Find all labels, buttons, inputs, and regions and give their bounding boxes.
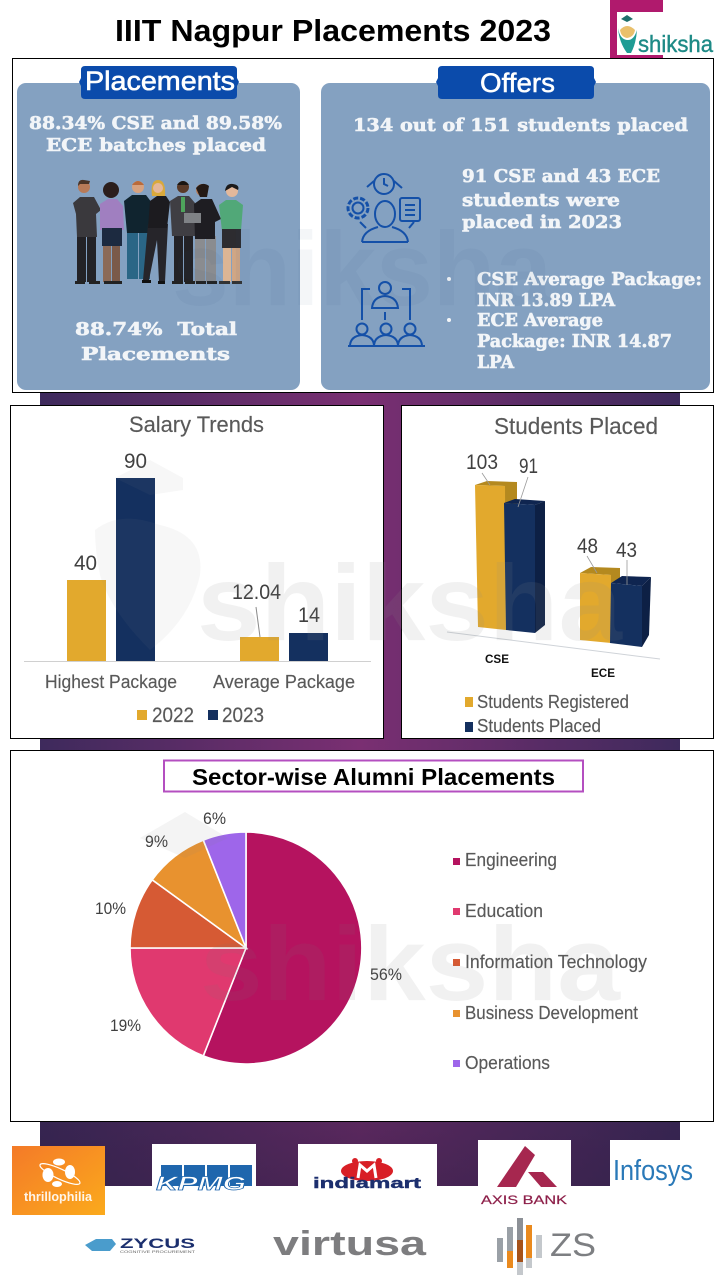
3d bar chart: students placed: CSE: [485, 652, 509, 666]
person 6: [184, 184, 221, 284]
bar chart: salary trends: Highest Package: [45, 672, 177, 692]
logo: kpmg: KPMG: [156, 1174, 246, 1195]
shiksha logo: shiksha: [638, 31, 713, 57]
person 7: [219, 184, 243, 284]
pie labels: 6%: [203, 809, 226, 828]
person 4: [142, 180, 170, 284]
logo: virtusa: virtusa: [273, 1225, 427, 1263]
3d bar chart: students placed: [447, 451, 660, 680]
logo: infosys: [610, 1140, 702, 1187]
heading tab: offers: [436, 66, 596, 99]
logo: thrillophilia: thrillophilia: [24, 1190, 93, 1204]
pie labels: [95, 809, 402, 1035]
watermark: top panel: shiksha: [172, 211, 554, 328]
legend: salary trends: 2023: [222, 704, 264, 727]
3d bar chart: students placed: ECE: [591, 666, 615, 680]
text: total placements: Placements: [81, 344, 230, 365]
person 3: [124, 181, 152, 279]
heading: sector-wise alumni placements: [164, 760, 583, 792]
legend: sectors: Information Technology: [465, 952, 647, 972]
text: cse and ece count: [462, 166, 660, 233]
heading tab: offers: Offers: [480, 68, 555, 98]
legend: sectors: Operations: [465, 1053, 550, 1073]
panel: top frame: [12, 58, 714, 392]
3d bar chart: students placed: 48: [577, 535, 598, 558]
person 5: [170, 181, 195, 284]
bar chart: salary trends: 90: [124, 450, 147, 473]
logo: infosys: Infosys: [613, 1155, 693, 1187]
heading: students placed: Students Placed: [494, 413, 658, 439]
person 2: [100, 182, 124, 284]
shiksha logo: [610, 0, 713, 58]
text: average packages: Package: INR 14.87: [477, 331, 672, 352]
legend: sectors: Business Development: [465, 1003, 638, 1023]
legend: sectors: Engineering: [465, 850, 557, 870]
logo: zs: [497, 1218, 596, 1275]
panel: students placed: [402, 406, 714, 738]
legend: sectors: Education: [465, 901, 543, 921]
logo: zycus: [85, 1235, 196, 1254]
bar chart: salary trends: 12.04: [232, 581, 281, 604]
text: average packages: ECE Average: [477, 310, 603, 331]
text: average packages: LPA: [477, 352, 515, 373]
watermark: charts: shiksha: [197, 542, 623, 663]
purple background band: [40, 392, 680, 1186]
logo: thrillophilia: [12, 1146, 105, 1215]
watermark icon: sector panel: [140, 812, 228, 858]
logo: zycus: COGNITIVE PROCUREMENT: [120, 1249, 196, 1254]
bar chart: salary trends: [24, 450, 371, 692]
panel: sector-wise placements: [10, 750, 714, 1122]
legend: students placed: Students Placed: [477, 716, 601, 736]
pie labels: 10%: [95, 899, 126, 918]
watermark icon: charts: [95, 460, 200, 650]
pie labels: 56%: [370, 965, 402, 984]
bar chart: salary trends: Average Package: [213, 672, 355, 692]
logo: indiamart: [298, 1144, 437, 1192]
text: average packages: CSE Average Package:: [477, 269, 702, 290]
3d bar chart: students placed: 103: [466, 451, 498, 474]
legend: sectors: [453, 850, 647, 1073]
text: batches placed: ECE batches placed: [46, 135, 266, 156]
text: students placed: 134 out of 151 students placed: [353, 115, 688, 136]
text: batches placed: 88.34% CSE and 89.58%: [29, 113, 282, 134]
logo: zs: ZS: [550, 1227, 596, 1263]
person 1: [73, 180, 101, 284]
text: total placements: 88.74% Total: [75, 319, 237, 340]
legend: students placed: [465, 692, 629, 736]
panel: offers: [321, 66, 710, 390]
logo: axis bank: AXIS BANK: [481, 1193, 567, 1207]
text: average packages: INR 13.89 LPA: [477, 290, 616, 311]
bar chart: salary trends: 14: [298, 604, 320, 627]
logo: axis bank: [478, 1140, 571, 1207]
3d bar chart: students placed: 91: [519, 455, 538, 478]
title: IIIT Nagpur Placements 2023: [115, 13, 551, 48]
heading: salary trends: Salary Trends: [129, 412, 264, 437]
panel: salary trends: [10, 406, 384, 738]
text: cse and ece count: students were: [462, 190, 620, 211]
icon: employee skills: [348, 174, 420, 242]
text: cse and ece count: 91 CSE and 43 ECE: [462, 166, 660, 187]
heading tab: placements: Placements: [85, 66, 235, 96]
legend: salary trends: 2022: [152, 704, 194, 727]
text: cse and ece count: placed in 2023: [462, 212, 622, 233]
logo: kpmg: [152, 1144, 256, 1195]
pie chart: sector shares: [130, 832, 362, 1064]
icon: mentor and team: [348, 282, 425, 346]
panel: placements: [17, 66, 300, 390]
watermark: sector panel: shiksha: [200, 906, 622, 1023]
legend: students placed: Students Registered: [477, 692, 629, 712]
logo: zycus: ZYCUS: [120, 1235, 195, 1251]
pie labels: 19%: [110, 1016, 141, 1035]
bar chart: salary trends: 40: [74, 552, 97, 575]
logo: indiamart: indiamart: [313, 1175, 421, 1192]
text: total placements: [75, 319, 237, 365]
icon: group of professionals: [73, 180, 243, 284]
heading: sector-wise alumni placements: Sector-wise Alumni Placements: [192, 764, 555, 790]
3d bar chart: students placed: 43: [616, 539, 637, 562]
legend: salary trends: [137, 704, 264, 727]
text: average packages: [447, 269, 702, 373]
pie labels: 9%: [145, 832, 168, 851]
text: batches placed: [29, 113, 282, 156]
